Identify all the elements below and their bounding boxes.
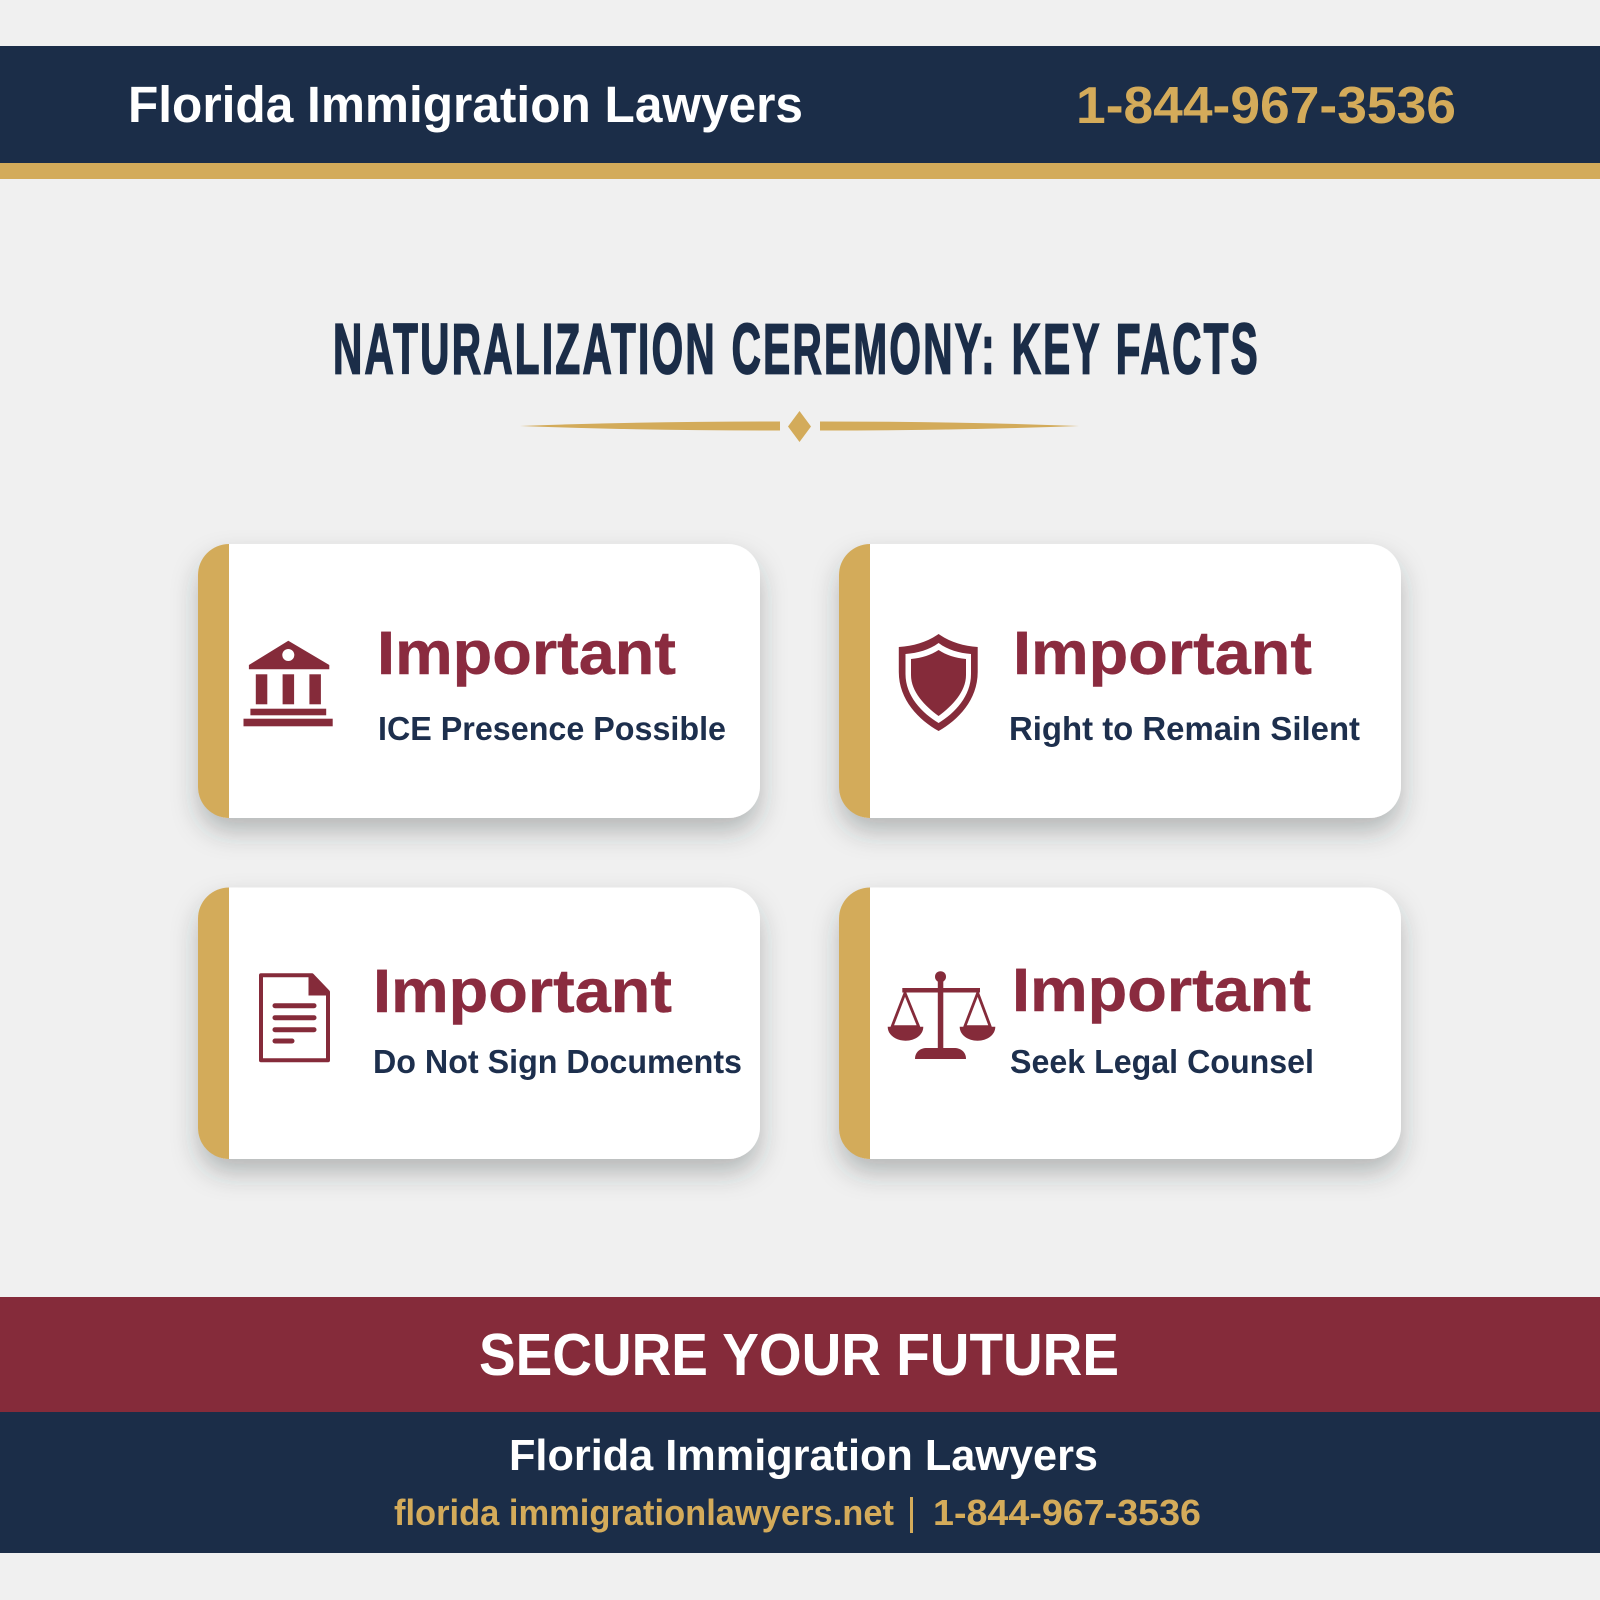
card background — [839, 888, 1401, 1159]
footer — [0, 1412, 1600, 1553]
panel: right to remain silent — [839, 544, 1401, 818]
heading: important: Important — [1013, 619, 1312, 687]
icon: scales of justice — [888, 971, 995, 1059]
label: right to remain silent: Right to Remain Silent — [1009, 710, 1360, 747]
icon: document — [261, 975, 329, 1060]
panel: ICE presence possible — [198, 544, 760, 818]
title divider — [520, 411, 1079, 442]
panel: seek legal counsel — [839, 888, 1401, 1159]
panel: do not sign documents — [198, 888, 760, 1159]
footer firm name: Florida Immigration Lawyers — [509, 1431, 1098, 1480]
heading: important: Important — [1012, 956, 1311, 1024]
icon: courthouse — [244, 641, 333, 726]
footer contact line — [394, 1492, 1201, 1533]
call to action text: SECURE YOUR FUTURE — [479, 1322, 1119, 1388]
label: do not sign documents: Do Not Sign Documents — [373, 1043, 742, 1080]
call to action band — [0, 1297, 1600, 1412]
card background — [198, 544, 760, 818]
label: ICE presence possible: ICE Presence Possible — [378, 710, 726, 747]
label: seek legal counsel: Seek Legal Counsel — [1010, 1043, 1314, 1080]
heading: important: Important — [373, 957, 672, 1025]
footer contact line: florida immigrationlawyers.net — [394, 1492, 894, 1533]
header firm name: Florida Immigration Lawyers — [128, 76, 803, 133]
footer contact line: 1-844-967-3536 — [933, 1492, 1201, 1533]
heading: important: Important — [377, 619, 676, 687]
header bar — [0, 46, 1600, 179]
header phone number: 1-844-967-3536 — [1076, 77, 1456, 135]
icon: shield — [899, 634, 978, 731]
card background — [839, 544, 1401, 818]
card background — [198, 888, 760, 1159]
